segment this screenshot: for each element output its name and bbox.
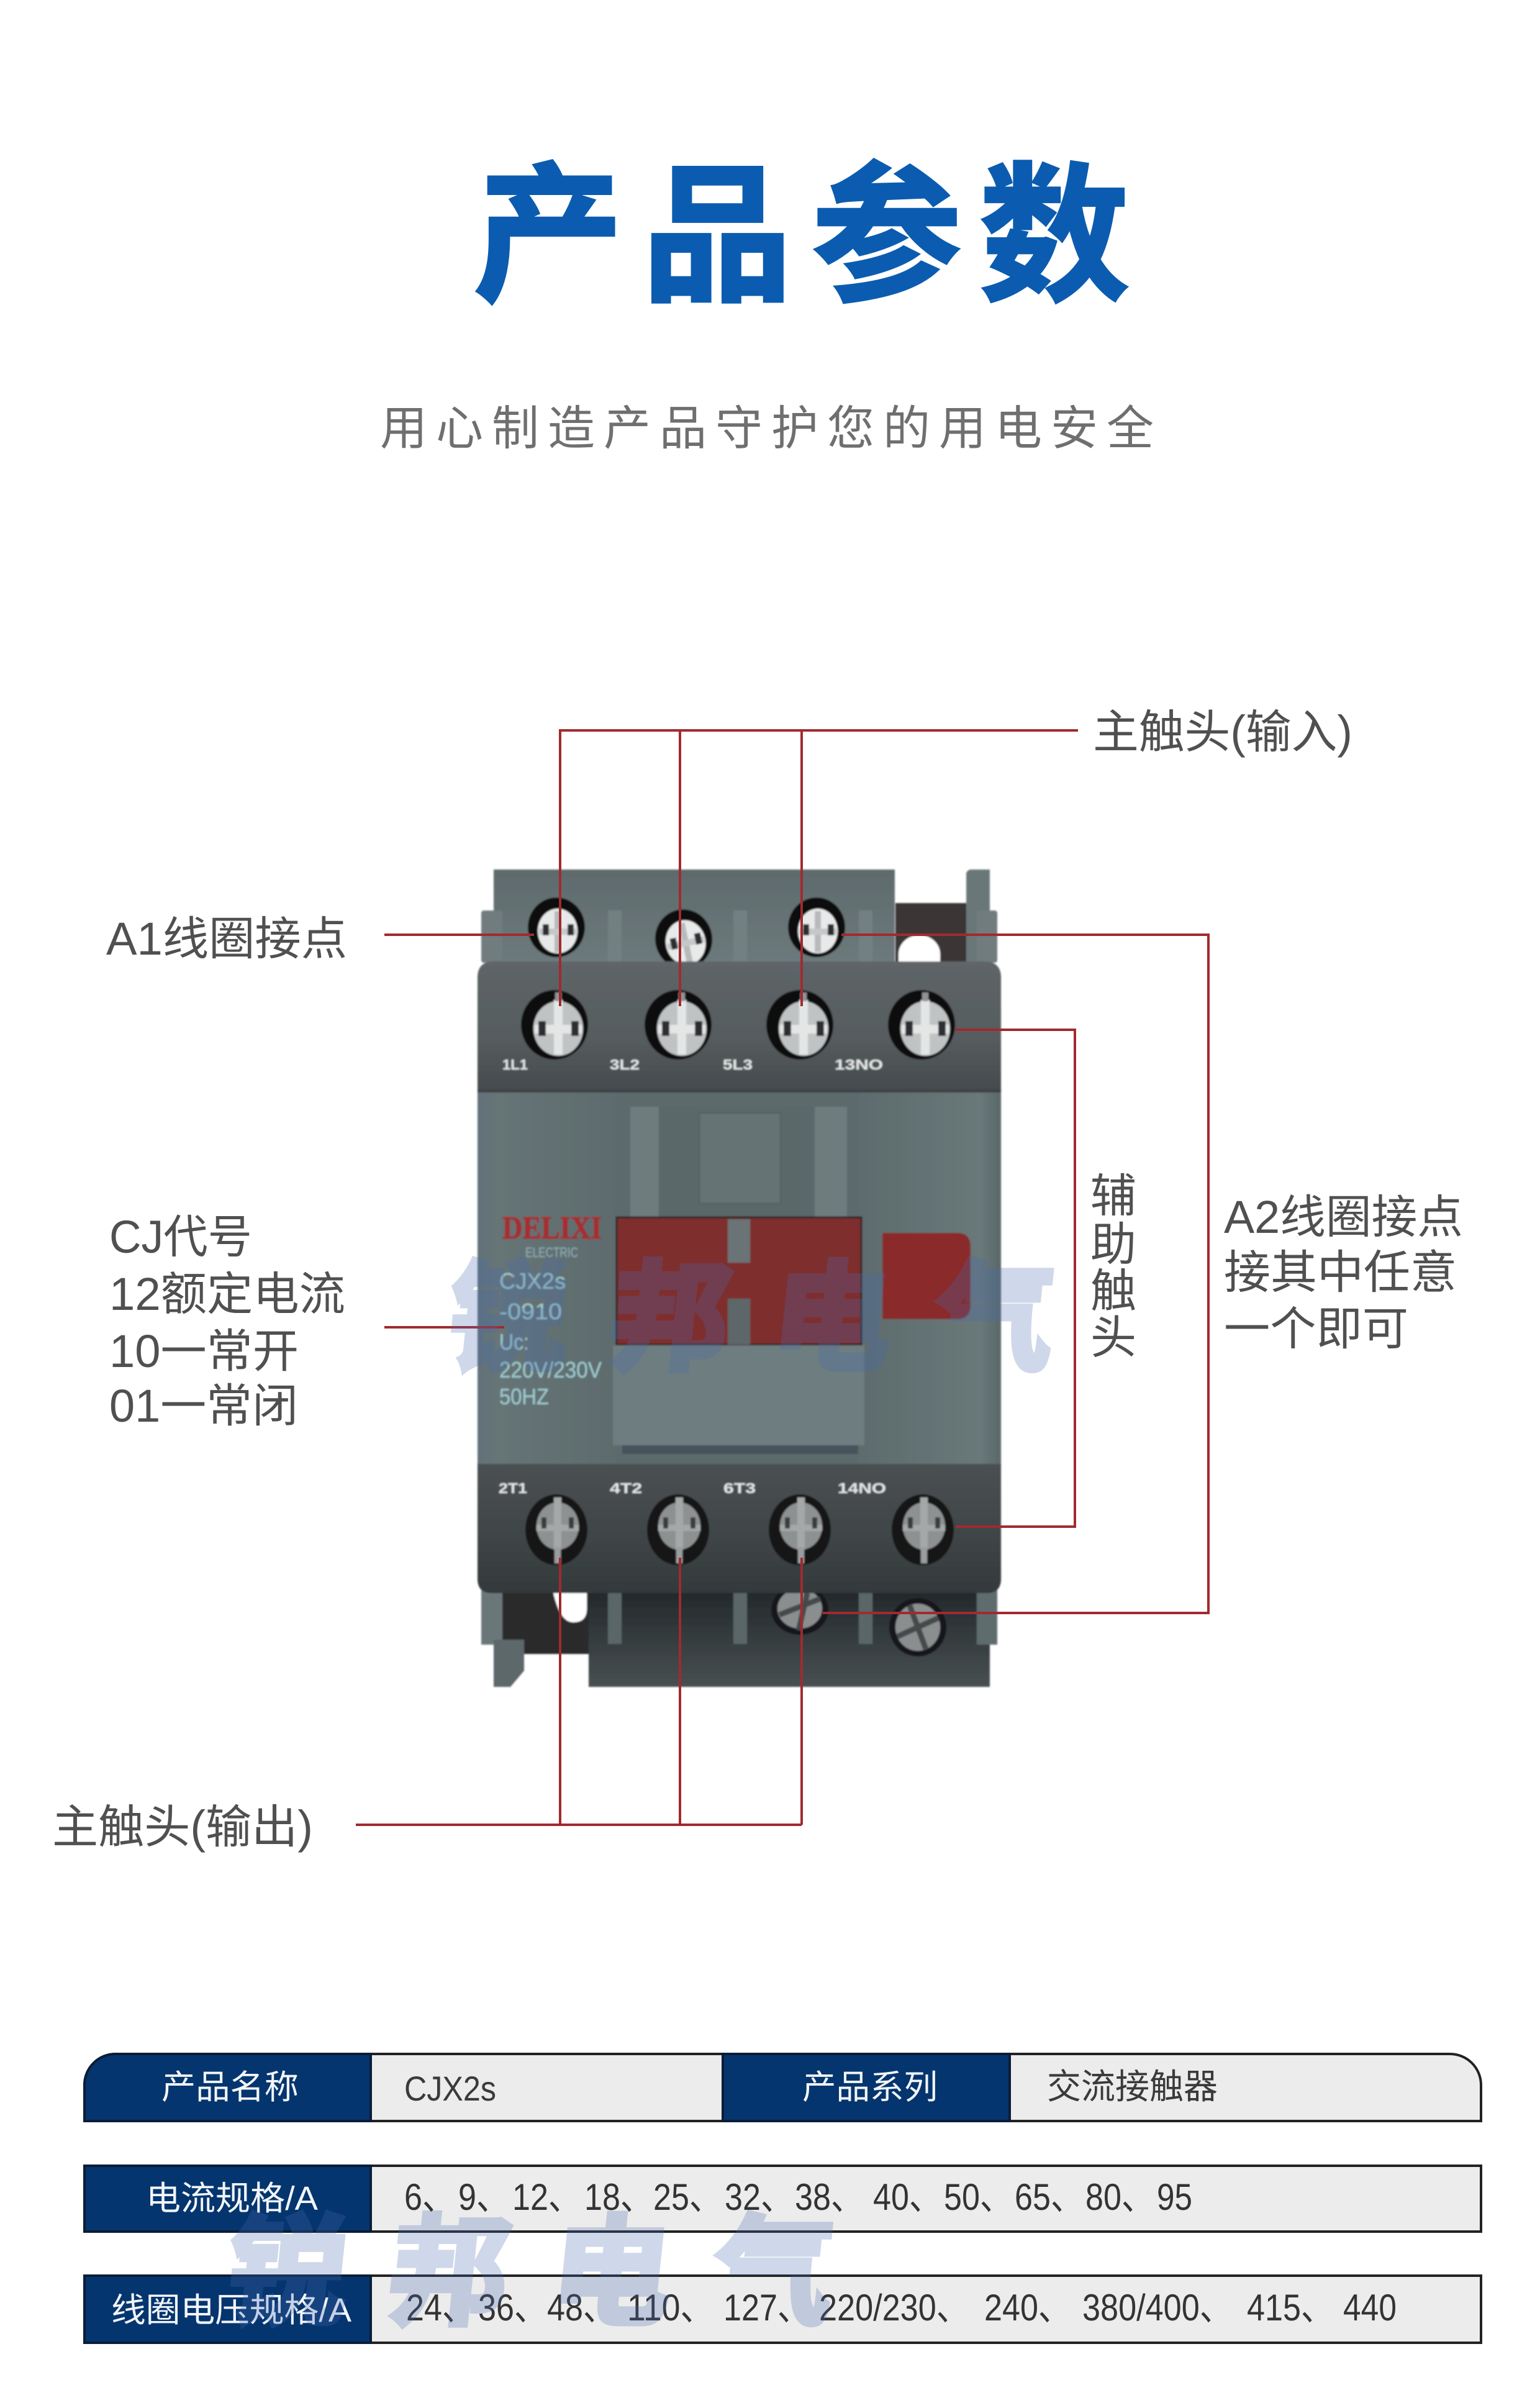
row: current ratings: 32、 xyxy=(725,2176,793,2218)
row: product name and series: CJX2s xyxy=(404,2069,496,2108)
icon: rear lower screws xyxy=(771,1585,946,1656)
title: 数 xyxy=(979,153,1130,321)
row: coil voltages: 24、 xyxy=(406,2287,474,2328)
row: current ratings: 18、 xyxy=(584,2176,653,2218)
spec table xyxy=(84,2054,1481,2343)
terminal labels bottom: 2T1 xyxy=(499,1480,527,1496)
watermark over table: 锐邦电气 xyxy=(221,2206,841,2340)
red side flag xyxy=(882,1233,971,1319)
row: current ratings: 38、 xyxy=(795,2176,863,2218)
label: model code: 12额定电流 xyxy=(109,1268,345,1320)
upper back housing xyxy=(481,870,997,963)
label: auxiliary contacts: 触 xyxy=(1090,1265,1136,1317)
red leader lines xyxy=(356,730,1208,1825)
base under lower terminals xyxy=(481,1590,997,1687)
label: auxiliary contacts xyxy=(1090,1170,1136,1363)
nameplate text xyxy=(499,1211,602,1409)
row: coil voltages: 240、 xyxy=(984,2287,1071,2328)
label: auxiliary contacts: 头 xyxy=(1090,1312,1136,1363)
label: A2 coil contact note: A2线圈接点 xyxy=(1224,1191,1463,1243)
label: auxiliary contacts: 助 xyxy=(1090,1219,1136,1270)
label: A1 coil contact: A1线圈接点 xyxy=(106,913,347,965)
row: product name and series xyxy=(84,2054,1481,2121)
row: current ratings: 95 xyxy=(1157,2176,1192,2218)
row: product name and series: 产品名称 xyxy=(161,2069,299,2106)
nameplate text: -0910 xyxy=(499,1299,562,1324)
terminal labels bottom: 14NO xyxy=(838,1480,886,1496)
nameplate text: Uc: xyxy=(499,1329,529,1355)
nameplate text: 220V/230V xyxy=(499,1357,602,1383)
row: current ratings xyxy=(84,2166,1481,2232)
title: 品 xyxy=(642,153,792,321)
label: model code: 10一常开 xyxy=(109,1325,299,1377)
title: 参 xyxy=(812,153,962,321)
sliding cover xyxy=(613,1345,864,1454)
row: current ratings: 6、 xyxy=(404,2176,455,2218)
row: current ratings: 65、 xyxy=(1015,2176,1083,2218)
label: A2 coil contact note xyxy=(1224,1191,1463,1355)
terminal labels top: 1L1 xyxy=(502,1056,528,1073)
terminal labels top xyxy=(502,1056,883,1073)
title xyxy=(473,153,1130,321)
label: A2 coil contact note: 接其中任意 xyxy=(1224,1247,1457,1298)
red indicator window xyxy=(617,1217,861,1345)
row: coil voltages: 110、 xyxy=(627,2287,713,2328)
icon: front terminal screws xyxy=(521,990,955,1060)
nameplate text: ELECTRIC xyxy=(525,1245,578,1260)
row: coil voltages: 36、 xyxy=(478,2287,546,2328)
terminal labels bottom: 4T2 xyxy=(610,1480,642,1496)
upper terminal cover xyxy=(478,961,1001,1089)
terminal labels top: 5L3 xyxy=(723,1056,753,1073)
icon: lower terminal screws xyxy=(525,1494,954,1565)
label: A2 coil contact note: 一个即可 xyxy=(1224,1303,1408,1355)
subtitle: 用心制造产品守护您的用电安全 xyxy=(380,402,1154,455)
row: coil voltages: 线圈电压规格/A xyxy=(111,2292,351,2329)
row: coil voltages: 380/400、 xyxy=(1082,2287,1232,2328)
row: coil voltages: 48、 xyxy=(547,2287,615,2328)
row: product name and series: 交流接触器 xyxy=(1047,2067,1218,2106)
row: coil voltages: 440 xyxy=(1343,2287,1397,2328)
icon: rear coil screws xyxy=(528,897,845,974)
row: product name and series: 产品系列 xyxy=(802,2069,938,2106)
row: current ratings: 40、 xyxy=(873,2176,941,2218)
label: model code: 01一常闭 xyxy=(109,1380,298,1432)
row: current ratings: 9、 xyxy=(458,2176,509,2218)
row: current ratings: 80、 xyxy=(1085,2176,1154,2218)
row: coil voltages: 415、 xyxy=(1247,2287,1333,2328)
watermark over product: 锐邦电气 xyxy=(442,1252,1061,1386)
middle body xyxy=(478,1089,1001,1465)
row: current ratings: 电流规格/A xyxy=(146,2180,318,2217)
label: model code xyxy=(109,1211,345,1432)
row: coil voltages: 127、 xyxy=(723,2287,810,2328)
title: 产 xyxy=(473,153,623,321)
row: coil voltages: 220/230、 xyxy=(819,2287,969,2328)
terminal labels top: 13NO xyxy=(835,1056,883,1073)
nameplate text: CJX2s xyxy=(499,1268,566,1294)
terminal labels top: 3L2 xyxy=(610,1056,640,1073)
row: current ratings: 12、 xyxy=(512,2176,581,2218)
row: current ratings: 25、 xyxy=(653,2176,722,2218)
label: auxiliary contacts: 辅 xyxy=(1090,1170,1136,1222)
label: model code: CJ代号 xyxy=(109,1211,252,1263)
lower terminal cover xyxy=(478,1464,1001,1593)
terminal labels bottom xyxy=(499,1480,886,1496)
row: current ratings: 50、 xyxy=(944,2176,1012,2218)
row: coil voltages xyxy=(84,2276,1481,2343)
label: main contacts input: 主触头(输入) xyxy=(1093,706,1352,758)
product: contactor xyxy=(478,870,1001,1687)
nameplate text: 50HZ xyxy=(499,1384,549,1409)
label: main contacts output: 主触头(输出) xyxy=(52,1801,313,1853)
terminal labels bottom: 6T3 xyxy=(723,1480,756,1496)
nameplate text: DELIXI xyxy=(502,1211,602,1246)
